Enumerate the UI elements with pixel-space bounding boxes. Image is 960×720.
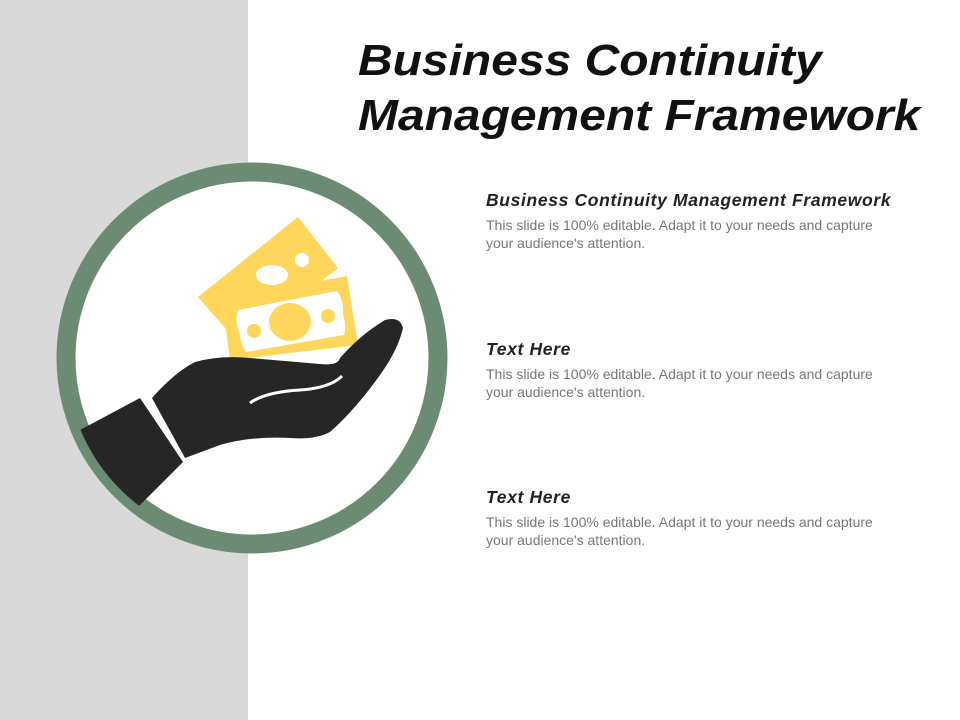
text block 1: This slide is 100% editable. Adapt it to your needs and capture your audience's attention. [486, 217, 873, 251]
text block 3 [486, 487, 873, 548]
text block 2 [486, 339, 873, 400]
title [358, 36, 922, 140]
title: Management Framework [358, 91, 920, 140]
text block 3: This slide is 100% editable. Adapt it to your needs and capture your audience's attention. [486, 514, 873, 548]
text block 2: This slide is 100% editable. Adapt it to your needs and capture your audience's attention. [486, 366, 873, 400]
text block 3: Text Here [486, 487, 571, 507]
front bill [222, 276, 358, 360]
text block 2: Text Here [486, 339, 571, 359]
text block 1 [486, 190, 892, 251]
hand [152, 319, 403, 458]
title: Business Continuity [358, 36, 822, 85]
icon: hand with money in circle [56, 162, 448, 554]
back bill [198, 217, 338, 329]
text block 1: Business Continuity Management Framework [486, 190, 891, 210]
